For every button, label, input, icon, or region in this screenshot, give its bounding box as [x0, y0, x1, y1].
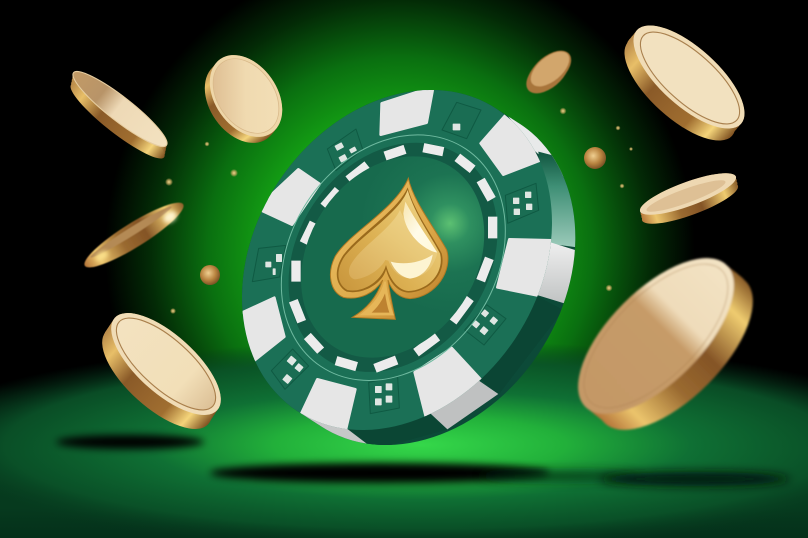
- coin: large lower right: [553, 233, 778, 455]
- inner ring: [236, 92, 551, 423]
- coin: top right: [609, 9, 760, 157]
- coin: top centre-left: [190, 41, 297, 157]
- coin: small top: [519, 43, 578, 101]
- gold particles: [165, 108, 633, 314]
- centre disc: [264, 121, 522, 393]
- coin: top left: [64, 63, 174, 167]
- dice pips: [265, 124, 532, 405]
- coin: thin left: [78, 194, 190, 276]
- poker chip: [242, 90, 576, 445]
- dice marks: [252, 102, 539, 414]
- gold ball: right: [584, 147, 606, 169]
- chip face: [179, 31, 615, 489]
- gold ball: left: [200, 265, 220, 285]
- coin: lower left: [86, 296, 237, 446]
- ring ticks: [293, 148, 493, 368]
- spade: [330, 178, 448, 319]
- coin: thin right: [636, 165, 742, 232]
- chip edge: [242, 90, 576, 445]
- white edge stripes: [233, 87, 563, 433]
- floor shadows: [56, 435, 790, 486]
